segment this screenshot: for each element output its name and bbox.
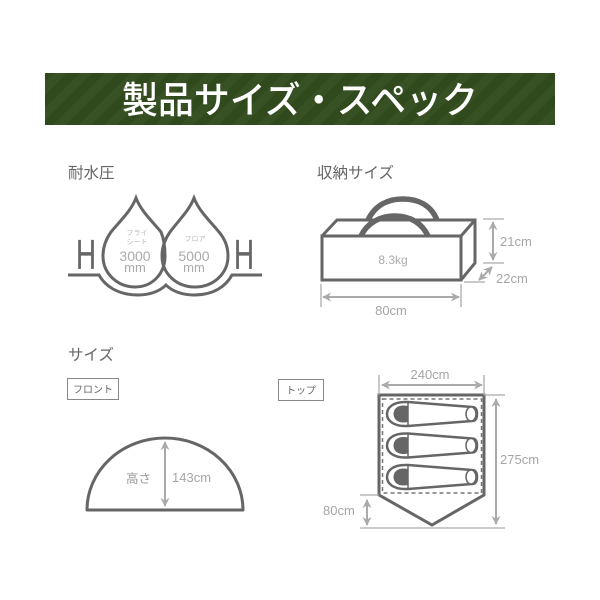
panel: size [68,346,539,528]
panel: storage size [317,164,532,318]
heading: size: サイズ [68,346,114,364]
dimension: vestibule 80cm [323,495,379,525]
tag: top [278,380,324,400]
dimension: width 80cm [321,284,461,318]
dimension: depth 22cm [464,267,528,286]
dimension: width 240cm: 240cm [410,367,450,382]
title banner [45,73,555,125]
heading: water pressure: 耐水圧 [68,164,115,182]
tag: front [68,378,118,400]
sleeping bag 1 [387,402,477,426]
diagram: tent top view [379,395,484,525]
label: fly sheet 3000 mm: シート [126,239,148,246]
label: floor 5000 mm: 5000 [178,248,210,264]
label: right H: H [234,231,254,278]
label: weight: 8.3kg [378,253,408,267]
icon: water drops and ground [68,198,262,295]
dimension: width 80cm: 80cm [375,303,407,318]
heading: storage size: 収納サイズ [317,164,394,182]
label: fly sheet 3000 mm: mm [124,260,146,275]
dimension: depth 22cm: 22cm [496,271,528,286]
dimension: height 21cm: 21cm [500,234,532,249]
label: floor 5000 mm: mm [183,260,205,275]
dimension: width 240cm [379,367,484,395]
label: floor 5000 mm: フロア [184,235,206,243]
label: floor 5000 mm [178,235,210,275]
sleeping bag 3 [387,465,477,489]
label: fly sheet 3000 mm: フライ [126,229,148,237]
diagram: tent front dome [87,438,243,510]
label: fly sheet 3000 mm [119,229,151,275]
label: left H: H [76,231,96,278]
title banner: 製品サイズ・スペック [122,80,478,121]
dimension: height 143cm: 高さ [126,471,151,486]
dimension: length 275cm: 275cm [500,452,539,467]
panel: water pressure [68,164,262,295]
tag: front: フロント [73,385,113,396]
sleeping bag 2 [387,434,477,458]
dimension: vestibule 80cm: 80cm [323,503,355,518]
icon: carry bag [322,199,475,280]
tag: top: トップ [286,385,316,397]
dimension: length 275cm [360,395,539,528]
label: fly sheet 3000 mm: 3000 [119,248,151,264]
dimension: height 143cm [126,442,211,506]
dimension: height 21cm [483,219,532,263]
dimension: height 143cm: 143cm [172,470,211,485]
